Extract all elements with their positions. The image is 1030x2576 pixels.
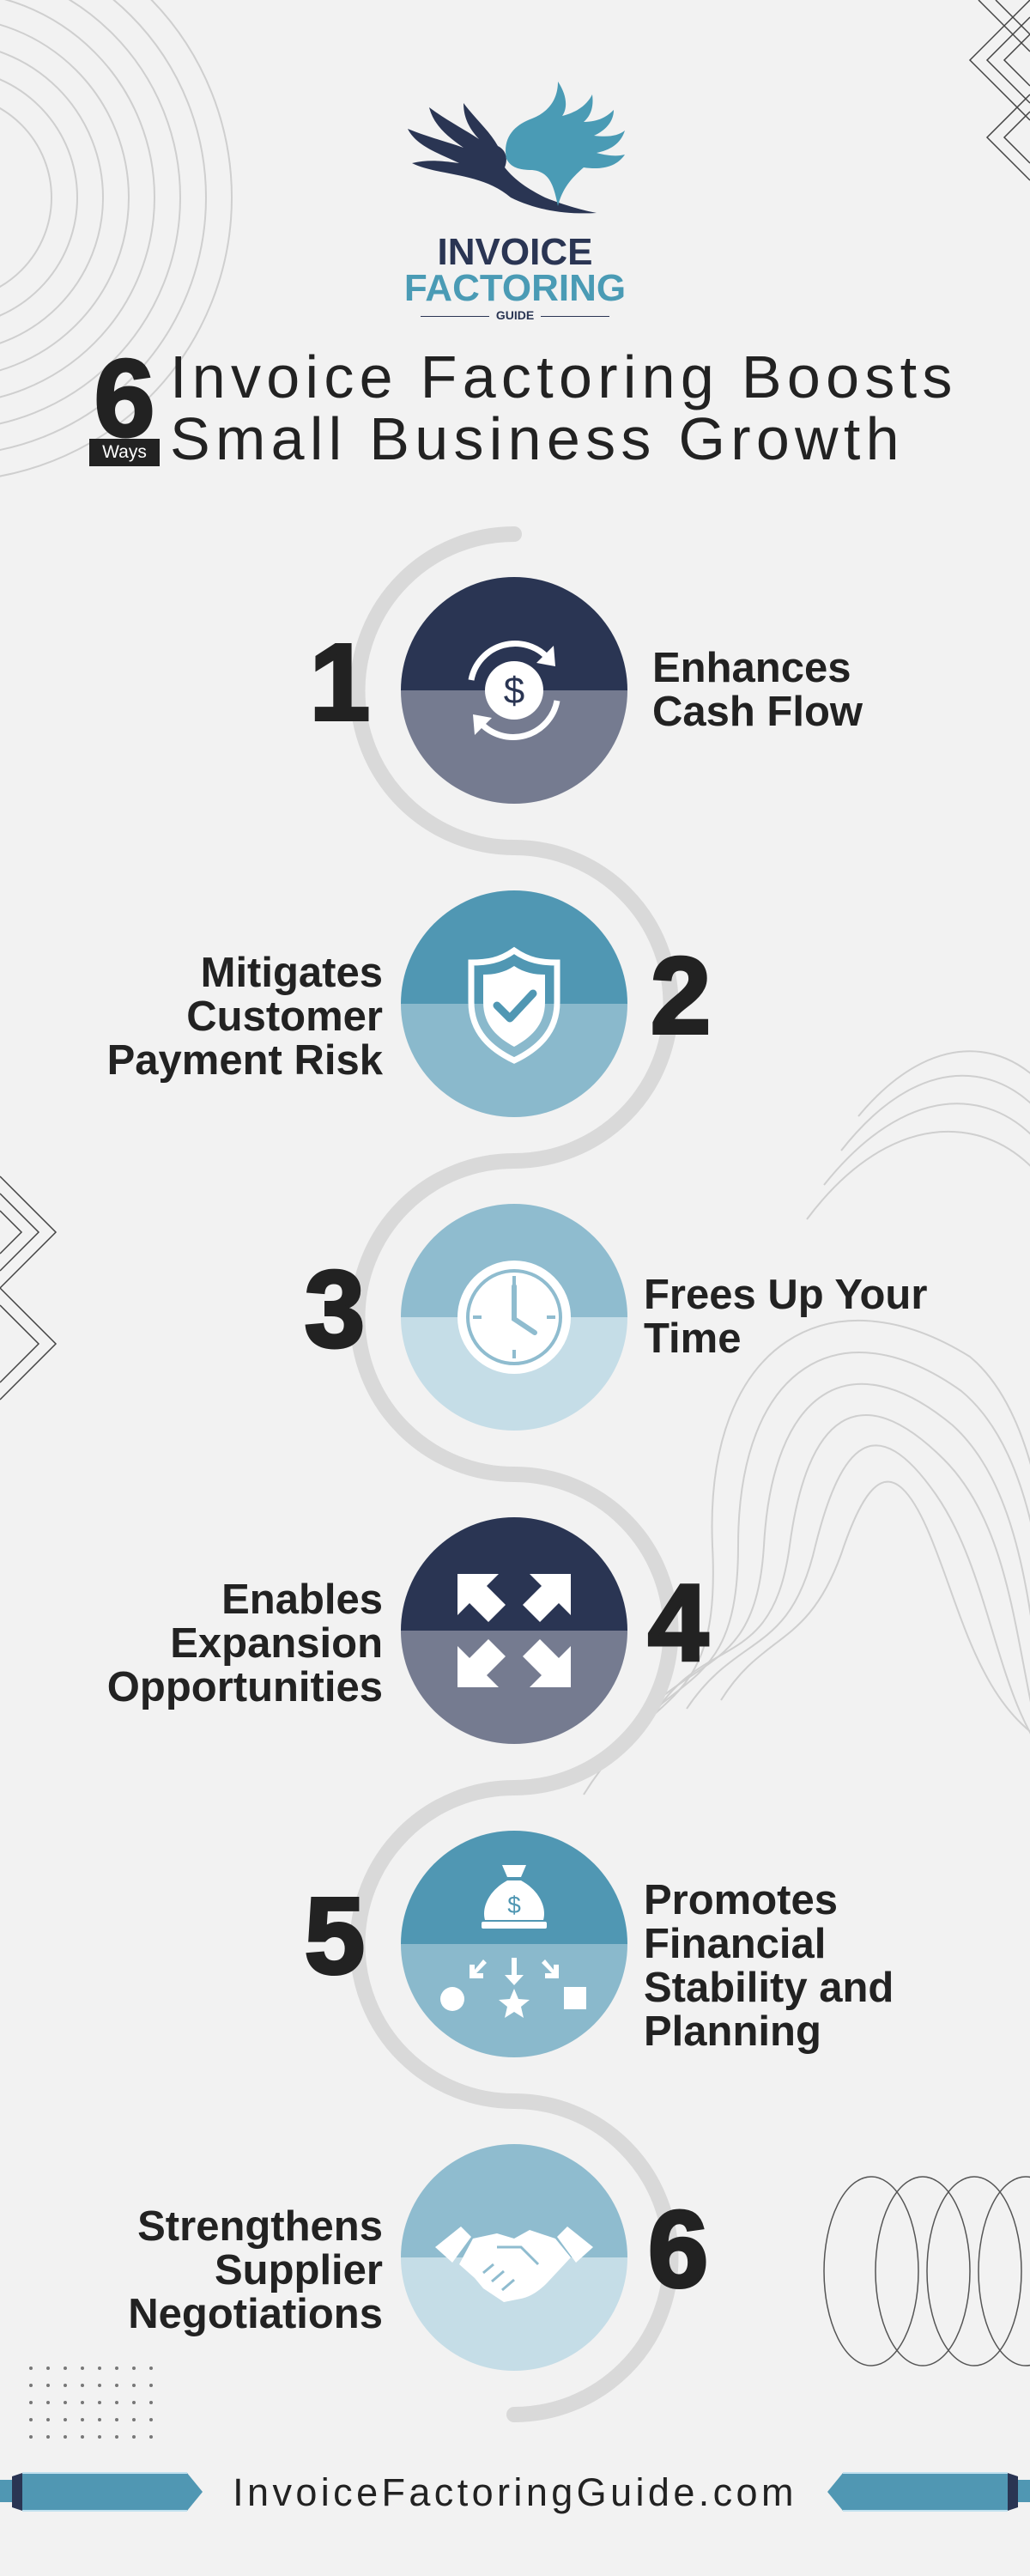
item 5: Planning bbox=[644, 2008, 821, 2055]
item 1: 1 bbox=[310, 622, 370, 743]
item 1: Cash Flow bbox=[652, 689, 863, 735]
icon: shield bbox=[401, 890, 627, 1117]
item 5: Promotes bbox=[644, 1877, 838, 1923]
item 5: Financial bbox=[644, 1921, 826, 1967]
item 2: 2 bbox=[651, 935, 711, 1056]
item 3: 3 bbox=[305, 1249, 365, 1370]
item 2: Payment Risk bbox=[107, 1037, 383, 1084]
item 2: Mitigates bbox=[201, 950, 383, 996]
item 5: Stability and bbox=[644, 1965, 894, 2011]
number 6 badge: Ways bbox=[102, 442, 147, 462]
icon: expansion arrows bbox=[401, 1517, 627, 1744]
icon: eagle bbox=[408, 82, 625, 213]
item 3 bbox=[305, 1204, 927, 1431]
item 6: 6 bbox=[648, 2189, 708, 2310]
logo: GUIDE bbox=[496, 308, 534, 322]
item 1: Enhances bbox=[652, 645, 851, 691]
ribbon left bbox=[0, 2472, 203, 2512]
item 6 bbox=[128, 2144, 708, 2371]
footer bbox=[0, 2470, 1030, 2514]
ribbon right bbox=[827, 2472, 1030, 2512]
icon: cash flow: $ bbox=[504, 670, 524, 712]
icon: money bag allocation: $ bbox=[507, 1892, 521, 1918]
item 6: Supplier bbox=[215, 2247, 383, 2293]
item 3: Frees Up Your bbox=[644, 1272, 927, 1318]
icon: handshake bbox=[401, 2144, 627, 2371]
icon: clock bbox=[401, 1204, 627, 1431]
title text bbox=[170, 343, 958, 472]
logo: FACTORING bbox=[404, 267, 626, 309]
number 6 badge: 6 bbox=[94, 337, 155, 460]
title text: Invoice Factoring Boosts bbox=[170, 343, 958, 410]
footer text: InvoiceFactoringGuide.com bbox=[233, 2470, 797, 2514]
item 2: Customer bbox=[186, 993, 383, 1040]
item 4: Opportunities bbox=[107, 1664, 383, 1710]
item 5 bbox=[305, 1831, 894, 2057]
icon: cash flow bbox=[401, 577, 627, 804]
icon: money bag allocation bbox=[401, 1831, 627, 2057]
item 2 bbox=[107, 890, 711, 1117]
logo: INVOICE bbox=[438, 231, 592, 273]
item 4: Expansion bbox=[170, 1620, 383, 1667]
title bbox=[89, 337, 958, 472]
item 6: Negotiations bbox=[128, 2291, 383, 2337]
item 5: 5 bbox=[305, 1875, 365, 1996]
item 3: Time bbox=[644, 1315, 741, 1362]
item 6: Strengthens bbox=[137, 2203, 383, 2250]
item 4: 4 bbox=[648, 1562, 708, 1683]
item 4 bbox=[107, 1517, 709, 1744]
logo bbox=[404, 82, 626, 322]
item 1 bbox=[310, 577, 863, 804]
item 4: Enables bbox=[221, 1577, 383, 1623]
title text: Small Business Growth bbox=[170, 405, 905, 472]
